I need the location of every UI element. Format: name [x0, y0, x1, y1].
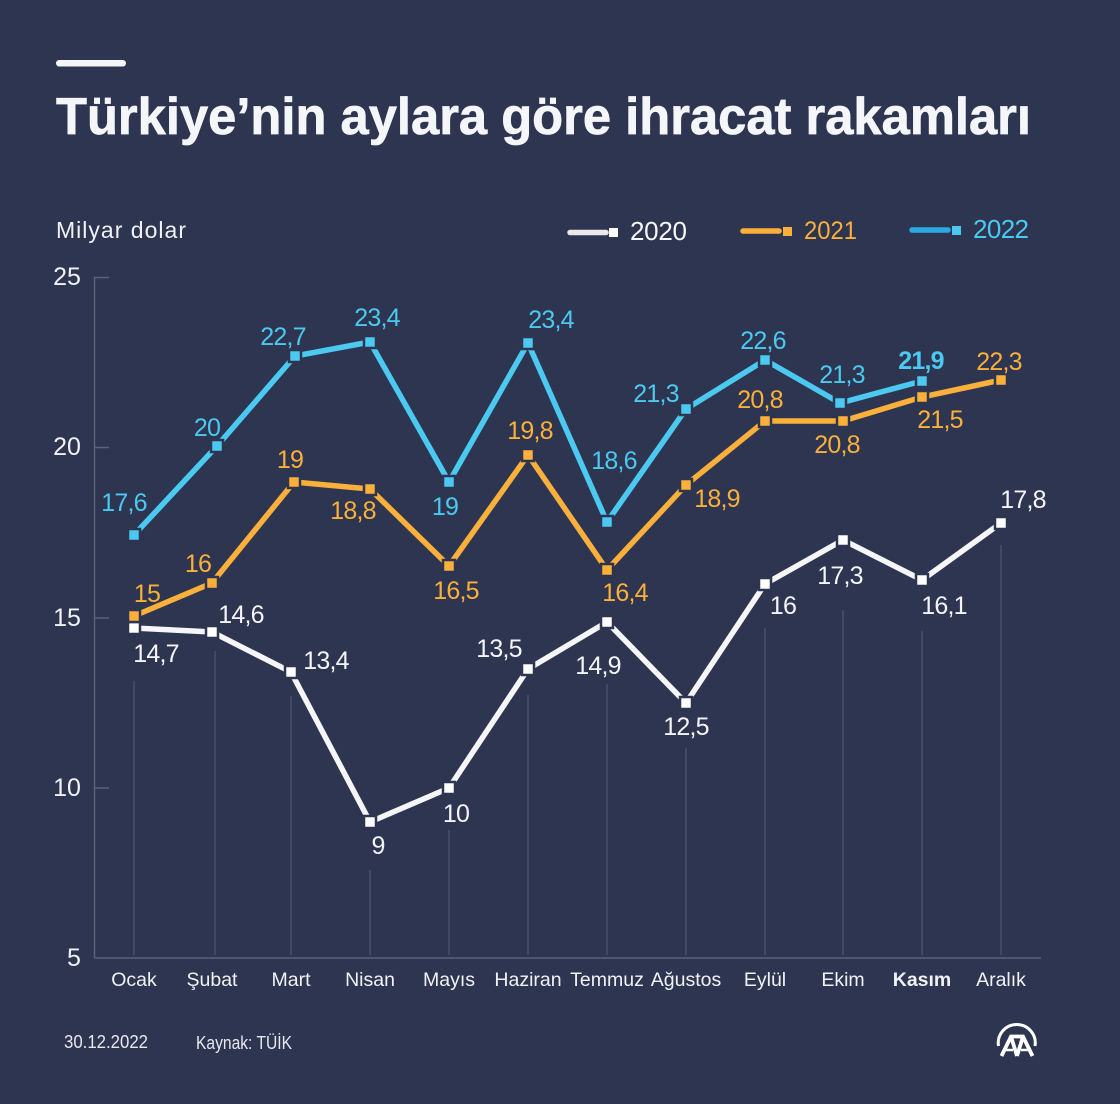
values 2020: 9 — [371, 832, 385, 860]
x axis month labels: Şubat — [187, 969, 238, 991]
values 2021: 16,4 — [602, 579, 649, 607]
values 2020: 14,9 — [575, 652, 621, 680]
y axis labels: 15 — [53, 604, 81, 632]
values 2021 — [134, 348, 1022, 608]
x axis month labels: Kasım — [893, 969, 951, 991]
line series 2020 — [128, 486, 1046, 860]
y axis labels: 10 — [53, 774, 81, 802]
values 2022: 22,7 — [260, 323, 306, 351]
x axis month labels: Nisan — [345, 969, 395, 991]
values 2022: 19 — [432, 493, 458, 521]
title: Türkiye’nin aylara göre ihracat rakamları — [56, 88, 1031, 146]
values 2020: 14,7 — [133, 640, 179, 668]
values 2020: 16,1 — [921, 592, 967, 620]
values 2020: 10 — [443, 800, 469, 828]
unit label: Milyar dolar — [56, 217, 186, 243]
y axis labels: 5 — [67, 944, 81, 972]
x axis month labels — [111, 969, 1026, 991]
y axis — [53, 263, 1041, 972]
line series 2021 — [128, 348, 1022, 622]
values 2021: 18,8 — [330, 497, 376, 525]
values 2021: 20,8 — [737, 386, 783, 414]
values 2021: 16 — [185, 550, 211, 578]
title accent bar — [56, 60, 126, 66]
values 2021: 18,9 — [694, 485, 740, 513]
legend: 2022: 2022 — [973, 214, 1029, 244]
values 2021: 15 — [134, 580, 160, 608]
legend: 2020 — [570, 216, 687, 246]
legend — [570, 214, 1029, 246]
values 2022: 21,9 — [898, 347, 944, 375]
month drop lines — [134, 545, 1001, 955]
x axis month labels: Eylül — [744, 969, 786, 991]
values 2022: 17,6 — [101, 489, 147, 517]
values 2020: 14,6 — [218, 601, 264, 629]
values 2020: 12,5 — [663, 713, 709, 741]
values 2022: 23,4 — [354, 304, 401, 332]
values 2022: 23,4 — [528, 306, 575, 334]
x axis month labels: Aralık — [976, 969, 1026, 991]
values 2021: 21,5 — [917, 406, 963, 434]
line series 2022 — [101, 304, 944, 541]
legend: 2021: 2021 — [804, 217, 857, 245]
y axis labels: 25 — [53, 263, 81, 291]
x axis month labels: Temmuz — [570, 969, 644, 991]
values 2020: 13,5 — [476, 635, 522, 663]
values 2020 — [133, 486, 1046, 860]
icon: AA logo — [998, 1024, 1035, 1056]
values 2020: 16 — [770, 592, 796, 620]
values 2020: 13,4 — [303, 647, 350, 675]
values 2021: 19,8 — [507, 417, 553, 445]
values 2022: 20 — [194, 414, 220, 442]
legend: 2020: 2020 — [630, 216, 687, 246]
legend: 2022 — [912, 214, 1029, 244]
y axis labels — [53, 263, 81, 972]
y axis labels: 20 — [53, 433, 81, 461]
date: 30.12.2022 — [64, 1032, 148, 1052]
values 2022: 22,6 — [740, 327, 786, 355]
values 2021: 16,5 — [433, 577, 479, 605]
values 2021: 19 — [277, 446, 303, 474]
x axis month labels: Ağustos — [651, 969, 721, 991]
x axis month labels: Ocak — [111, 969, 157, 991]
values 2022: 21,3 — [819, 361, 865, 389]
values 2022: 21,3 — [633, 380, 679, 408]
values 2021: 20,8 — [814, 431, 860, 459]
values 2022: 18,6 — [591, 447, 637, 475]
values 2020: 17,3 — [817, 562, 863, 590]
x axis month labels: Mayıs — [423, 969, 475, 991]
x axis month labels: Mart — [272, 969, 311, 991]
values 2021: 22,3 — [976, 348, 1022, 376]
x axis month labels: Haziran — [494, 969, 562, 991]
source: Kaynak: TÜİK — [196, 1033, 292, 1053]
values 2022 — [101, 304, 944, 521]
legend: 2021 — [743, 217, 857, 245]
x axis month labels: Ekim — [821, 969, 865, 991]
values 2020: 17,8 — [1000, 486, 1046, 514]
